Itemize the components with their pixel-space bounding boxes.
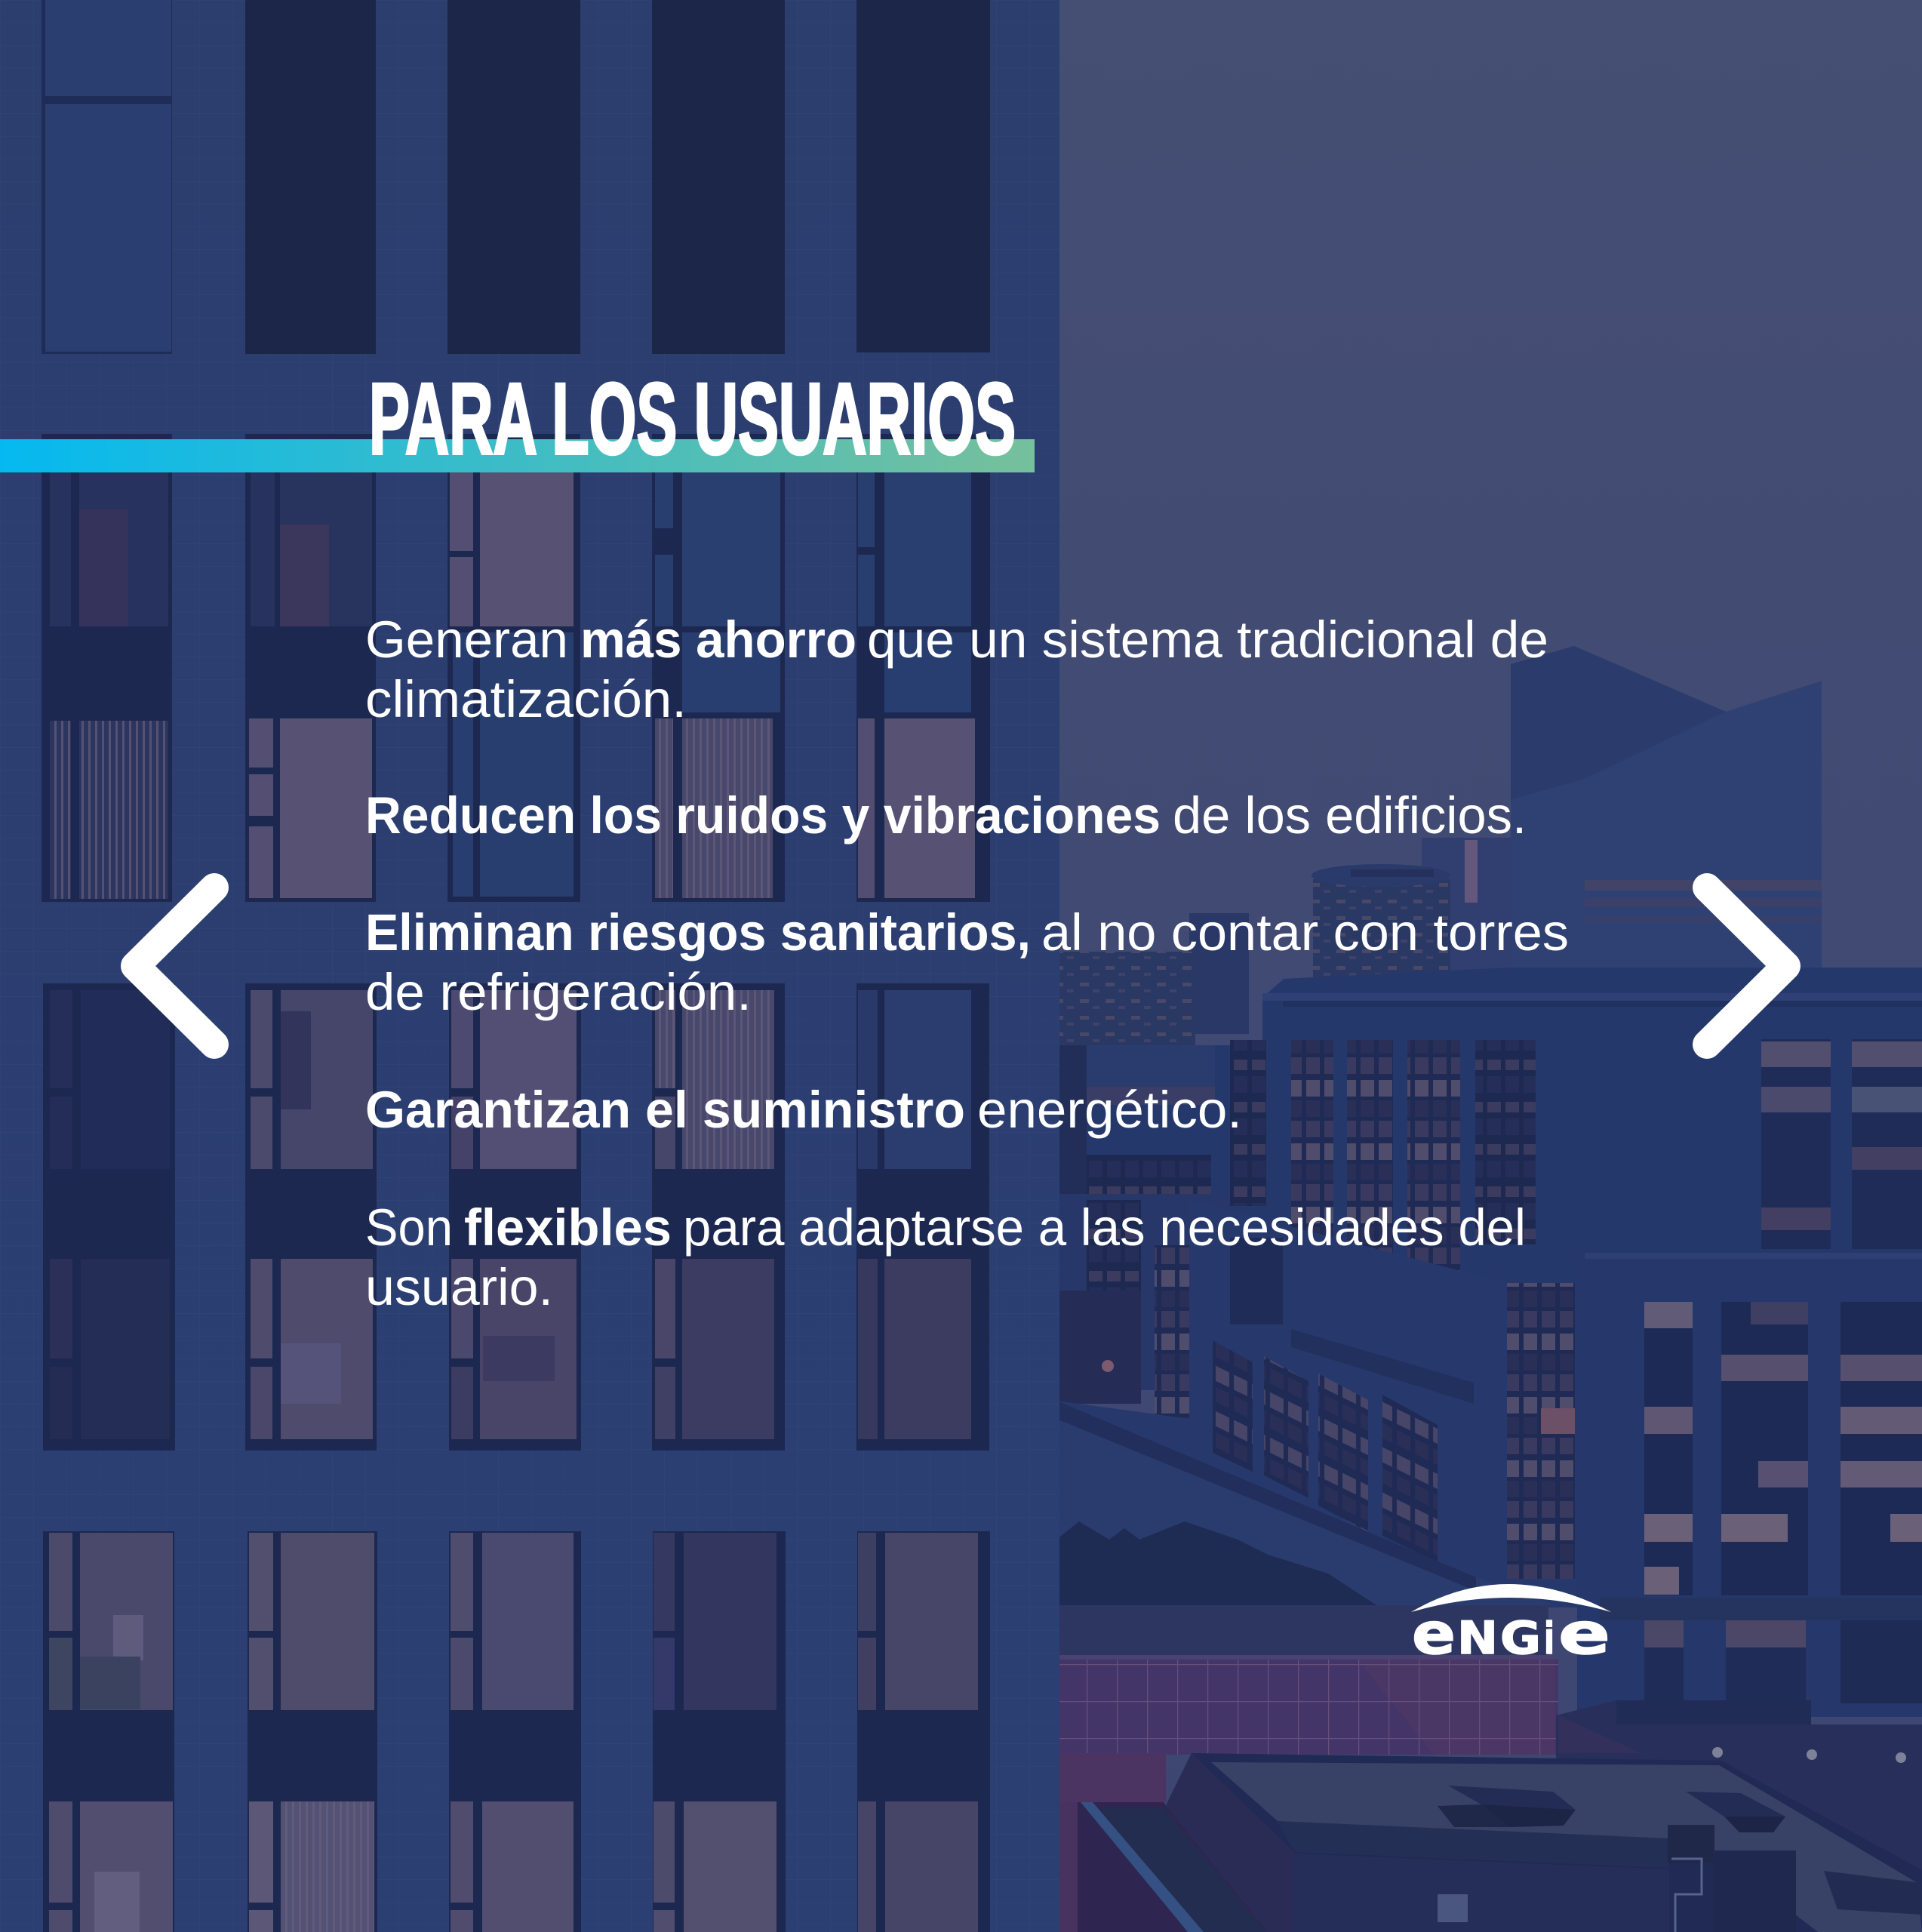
right block with lit floors: [1577, 1039, 1922, 1717]
column 5: [858, 472, 875, 547]
item: flexibles: [365, 1198, 1526, 1316]
logo wordmark: [1412, 1600, 1610, 1667]
roof terrace diagonal: [1056, 1401, 1555, 1605]
logo wordmark: G: [1500, 1612, 1541, 1665]
column 3: [451, 990, 473, 1088]
gradient bar: [0, 439, 1035, 472]
top row of windows: [42, 0, 990, 354]
logo wordmark: e: [1412, 1600, 1456, 1667]
item: ruidos: Reducen los ruidos y vibraciones: [365, 786, 1161, 844]
arrow: previous: [135, 888, 214, 1044]
left far towers: [1056, 913, 1249, 1054]
item: flexibles: para adaptarse a las necesidades del: [683, 1198, 1526, 1257]
body text: [365, 611, 1569, 1316]
column 4: [655, 472, 673, 528]
third row of windows: [43, 983, 989, 1451]
lower lit panes: [49, 1801, 72, 1903]
second row of windows: [42, 434, 990, 902]
trees: [1056, 1521, 1376, 1605]
distant tower with angular roof: [1511, 646, 1822, 981]
item: suministro: energético.: [977, 1081, 1242, 1139]
photo background: skyline on the right: [1056, 0, 1922, 1932]
column 2: [251, 472, 275, 626]
item: riesgos sanitarios: [365, 903, 1569, 1021]
column 5: [858, 990, 878, 1169]
logo arc: [1411, 1584, 1611, 1612]
column 1: [50, 472, 71, 626]
item: ruidos: de los edificios.: [1173, 786, 1527, 844]
item: flexibles: Son: [365, 1198, 453, 1257]
upper lit panes: [49, 1533, 72, 1631]
item: flexibles: flexibles: [464, 1198, 672, 1257]
fourth row of windows: [43, 1531, 990, 1932]
item: flexibles: usuario.: [365, 1258, 553, 1316]
item: suministro: Garantizan el suministro: [365, 1081, 965, 1139]
column 1: [50, 990, 72, 1088]
small tower behind: [1422, 838, 1511, 981]
item: ahorro: climatización.: [365, 670, 687, 728]
lower left block: [1056, 1194, 1585, 1607]
logo wordmark: e: [1558, 1600, 1610, 1667]
arrow: next: [1707, 888, 1786, 1044]
logo wordmark: i: [1544, 1613, 1555, 1664]
item: ahorro: más ahorro: [580, 611, 856, 669]
column 3: [450, 472, 473, 551]
slanted window groups: [1213, 1283, 1575, 1579]
low-rise glass building: [1056, 1605, 1558, 1932]
logo wordmark: N: [1457, 1612, 1498, 1665]
main office block: [1056, 968, 1922, 1364]
foreground low building with roof: [1078, 1753, 1922, 1932]
item: ahorro: que un sistema tradicional de: [867, 611, 1548, 669]
column 4: [655, 990, 675, 1088]
item: riesgos sanitarios: Eliminan riesgos sanitarios,: [365, 903, 1031, 961]
item: suministro: [365, 1081, 1242, 1139]
column 2: [251, 990, 272, 1088]
item: riesgos sanitarios: de refrigeración.: [365, 963, 752, 1021]
item: ahorro: Generan: [365, 611, 568, 669]
title: PARA LOS USUARIOS: [369, 363, 1016, 475]
logo: ENGIE: [1411, 1584, 1611, 1667]
photo background: building facade on the left: [0, 0, 1059, 1932]
round building: [1312, 864, 1450, 977]
item: riesgos sanitarios: al no contar con torres: [1041, 903, 1569, 961]
dark ground right: [1556, 1700, 1922, 1932]
item: ahorro: [365, 611, 1548, 728]
